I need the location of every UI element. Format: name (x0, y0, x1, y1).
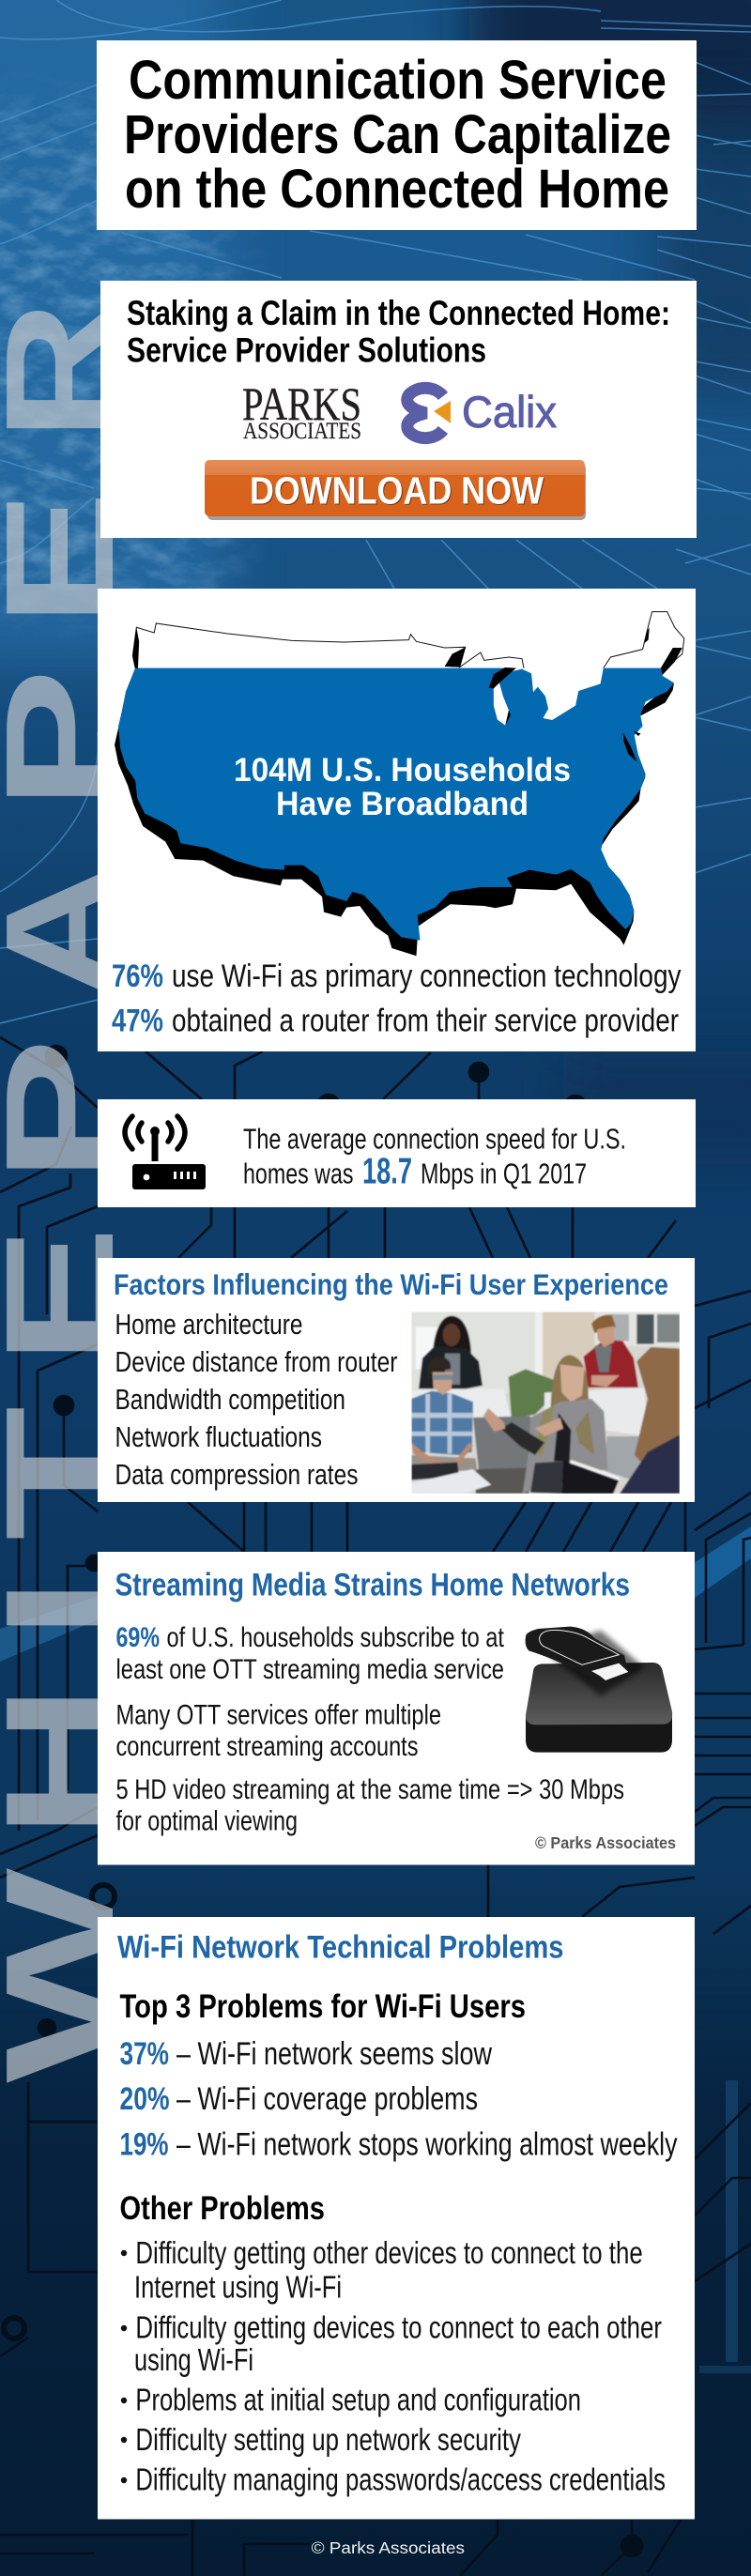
title text: Communication Service (129, 50, 667, 111)
other problems subheading: Other Problems (120, 2189, 325, 2227)
logo: Parks Associates: PARKS (242, 377, 361, 430)
other problems list: using Wi-Fi (134, 2343, 253, 2378)
panel: factors influencing Wi-Fi (98, 1258, 695, 1502)
panel: white paper download (100, 281, 697, 538)
other problems list: Internet using Wi-Fi (134, 2270, 342, 2306)
logo: Calix: Calix (462, 387, 557, 437)
map of the United States (115, 612, 684, 956)
stat: router from provider: 47% (112, 1004, 163, 1039)
factors list (115, 1309, 398, 1491)
top 3 problems stats: 37% (120, 2036, 169, 2072)
map label: Have Broadband (276, 786, 529, 822)
speed text: The average connection speed for U.S. (243, 1124, 626, 1156)
button: download now: DOWNLOAD NOW (251, 469, 544, 513)
streaming heading: Streaming Media Strains Home Networks (115, 1568, 630, 1603)
streaming stat text: least one OTT streaming media service (116, 1654, 504, 1685)
streaming stat text: concurrent streaming accounts (116, 1731, 419, 1762)
top 3 problems stats: 20% (120, 2081, 169, 2117)
top 3 subheading: Top 3 Problems for Wi-Fi Users (120, 1987, 526, 2025)
panel: connection speed (98, 1099, 696, 1207)
icon: wireless router (125, 1116, 206, 1189)
streaming stat text: Many OTT services offer multiple (116, 1699, 441, 1731)
title text (124, 50, 671, 220)
top 3 problems stats: 19% (120, 2127, 169, 2163)
factors list: Network fluctuations (115, 1421, 322, 1453)
title text: on the Connected Home (125, 159, 669, 220)
button: download now: DOWNLOAD NOW (250, 469, 544, 513)
watermark: WHITE PAPER vertical lettering (0, 300, 146, 2083)
speed text: 18.7 (362, 1152, 412, 1192)
logo: Parks Associates (242, 377, 361, 444)
factors list: Data compression rates (115, 1459, 359, 1491)
factors list: Bandwidth competition (115, 1384, 345, 1416)
streaming stat text: of U.S. households subscribe to at (167, 1622, 505, 1653)
stat: Wi-Fi primary connection: 76% (112, 958, 163, 994)
photo: team in discussion (411, 1311, 680, 1494)
speed text (243, 1124, 626, 1192)
title text: Providers Can Capitalize (124, 104, 671, 165)
top 3 problems stats: – Wi-Fi network seems slow (176, 2036, 492, 2072)
panel: streaming media (98, 1552, 695, 1864)
panel: title (97, 40, 697, 230)
factors list: Device distance from router (115, 1346, 398, 1378)
logo: Calix (407, 387, 557, 438)
factors heading: Factors Influencing the Wi-Fi User Experience (114, 1267, 668, 1301)
white paper heading (127, 293, 670, 370)
map label (234, 752, 571, 822)
other problems list (121, 2236, 666, 2497)
footer credit: © Parks Associates (312, 2538, 465, 2557)
button: download now (205, 460, 586, 520)
streaming stat text: 5 HD video streaming at the same time => 30 Mbps (116, 1774, 624, 1805)
icon: streaming box and dongle (526, 1627, 672, 1753)
logo: Parks Associates: ASSOCIATES (243, 419, 361, 444)
speed text: homes was (243, 1158, 353, 1190)
background: fibre strands (0, 0, 751, 1023)
credit: © Parks Associates (535, 1833, 676, 1852)
panel: Wi-Fi technical problems (98, 1917, 695, 2520)
streaming stat text: for optimal viewing (116, 1806, 298, 1836)
other problems list: Difficulty setting up network security (135, 2423, 521, 2458)
speed text: Mbps in Q1 2017 (421, 1158, 587, 1190)
panel: U.S. broadband map (98, 589, 696, 1051)
streaming stat text (116, 1622, 624, 1836)
problems heading: Wi-Fi Network Technical Problems (117, 1930, 563, 1966)
map label: 104M U.S. Households (234, 752, 571, 789)
factors list: Home architecture (115, 1309, 302, 1341)
top 3 problems stats (120, 2036, 678, 2163)
streaming stat text: 69% (116, 1622, 160, 1653)
white paper heading: Service Provider Solutions (127, 330, 486, 370)
other problems list: Problems at initial setup and configuration (135, 2383, 581, 2418)
background: circuit traces (0, 1037, 751, 2576)
top 3 problems stats: – Wi-Fi coverage problems (176, 2081, 478, 2117)
